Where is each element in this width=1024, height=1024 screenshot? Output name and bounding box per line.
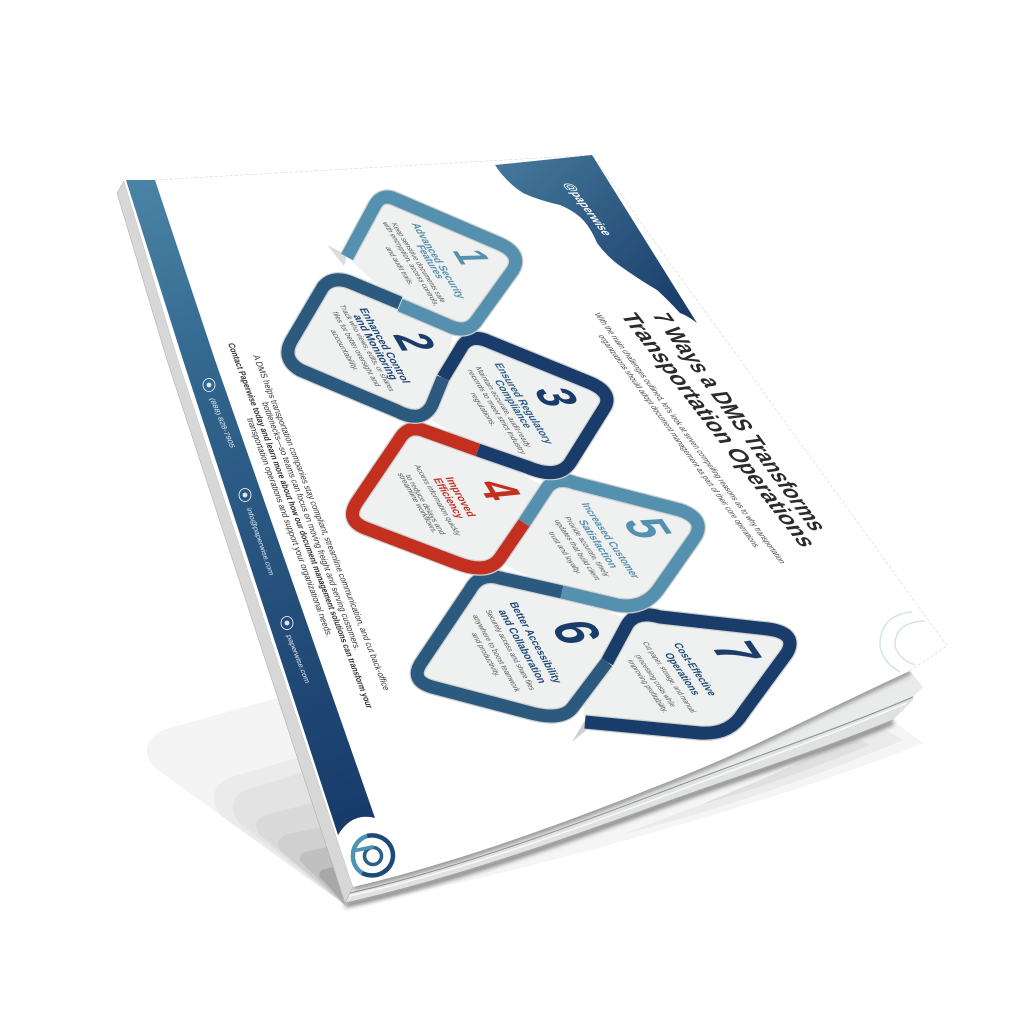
brand wordmark: @paperwise bbox=[560, 183, 616, 236]
card 2: Enhanced Control bbox=[356, 308, 412, 383]
card 3: regulations. bbox=[468, 393, 499, 427]
floor shadow: left bbox=[147, 698, 345, 905]
brochure mockup bbox=[116, 154, 947, 910]
card 6: and Collaboration bbox=[495, 609, 548, 684]
card 2 bbox=[288, 280, 447, 416]
card 7: processing costs while bbox=[633, 654, 678, 707]
title: 7 Ways a DMS Transforms bbox=[646, 311, 833, 532]
card 5: updates that build client bbox=[552, 520, 603, 581]
page edge dashes bbox=[155, 155, 947, 671]
card 2: files for better oversight and bbox=[330, 312, 383, 387]
title: Transportation Operations bbox=[614, 311, 822, 548]
card 4: 4 bbox=[466, 478, 533, 502]
card 1: and audit trails. bbox=[383, 247, 416, 285]
contact: phone: (888) 828-7905 bbox=[208, 398, 235, 448]
card 7 bbox=[572, 615, 790, 742]
card 5 bbox=[524, 480, 698, 606]
contact: website: paperwise.com bbox=[285, 635, 311, 684]
floor shadow: right bbox=[345, 718, 923, 907]
page stack bbox=[345, 671, 923, 904]
card 6 bbox=[417, 576, 615, 716]
card 7: 7 bbox=[698, 637, 775, 667]
card 3: Maintain accurate, audit-ready bbox=[473, 367, 534, 447]
card 1: Advanced Security bbox=[408, 223, 468, 299]
card 2: Track who views, edits, or shares bbox=[337, 305, 397, 392]
card 7: Cut paper, storage, and manual bbox=[640, 641, 698, 713]
card 7: improving profitability. bbox=[625, 659, 671, 713]
closing text: bottlenecks—so teams can focus on moving freight and serving customers. bbox=[260, 402, 363, 651]
card 3: Ensured Regulatory bbox=[491, 363, 555, 445]
card 1 bbox=[327, 197, 516, 329]
lower pages bbox=[345, 697, 913, 903]
card 5: Satisfaction bbox=[575, 519, 620, 569]
card 6: Better Accessibility bbox=[506, 601, 564, 685]
intro text: With the main challenges outlined, let's look at seven compelling reasons as to why transportation bbox=[592, 312, 788, 564]
card 4: streamline workflows. bbox=[395, 473, 440, 534]
contact: website bbox=[281, 616, 311, 684]
card 7: Cost-Effective bbox=[670, 642, 719, 697]
card 3 bbox=[443, 338, 607, 473]
contact: email bbox=[239, 488, 275, 576]
card backgrounds bbox=[288, 197, 790, 733]
closing text: transportation operations and support your organizational needs. bbox=[245, 418, 335, 637]
contact: phone bbox=[203, 378, 235, 448]
sidebar band bbox=[126, 180, 375, 835]
card 4: Efficiency bbox=[430, 477, 466, 520]
card 4: Access information quickly bbox=[412, 465, 463, 536]
card 6: anywhere to boost teamwork bbox=[470, 614, 522, 692]
card 1: 1 bbox=[442, 248, 500, 266]
card 4: Improved bbox=[442, 476, 478, 517]
card 6: and productivity. bbox=[469, 632, 503, 677]
card 1: Keep sensitive documents safe bbox=[389, 223, 448, 303]
closing text: Contact Paperwise today and learn more about how our document management solutions can transform your bbox=[226, 343, 375, 709]
card 6: 6 bbox=[537, 616, 615, 648]
card 5: Increased Customer bbox=[578, 502, 642, 579]
card 2: and Monitoring bbox=[350, 315, 400, 380]
card 3: 3 bbox=[522, 386, 592, 408]
card 5: 5 bbox=[609, 515, 686, 541]
upper curled page bbox=[352, 671, 923, 891]
card 2: 2 bbox=[381, 331, 447, 353]
intro text: organizations should adopt document management as part of their core operations. bbox=[596, 334, 763, 549]
card 5: Provide accurate, timely bbox=[562, 517, 612, 577]
closing text: A DMS helps transportation companies stay compliant, streamline communication, and cut back-office bbox=[251, 355, 392, 691]
page bbox=[124, 155, 947, 887]
card 6: Securely access and share files bbox=[483, 609, 537, 691]
card 4 bbox=[352, 429, 533, 568]
card 2: accountability. bbox=[328, 330, 361, 371]
card 4: to reduce delays and bbox=[403, 475, 447, 535]
card 1: with encryption, access controls, bbox=[380, 221, 442, 306]
card 7: Operations bbox=[661, 652, 702, 696]
card 5: trust and loyalty. bbox=[546, 532, 584, 575]
watermark arcs bbox=[880, 612, 925, 672]
card 1: Features bbox=[413, 245, 446, 279]
spine edge bbox=[117, 181, 353, 903]
icon: paperwise logo mark bbox=[353, 835, 393, 875]
header wave bbox=[495, 155, 697, 323]
contact: email: info@paperwise.com bbox=[245, 508, 275, 576]
card 3: Compliance bbox=[491, 380, 534, 428]
card 3: records to meet strict industry bbox=[465, 370, 528, 455]
